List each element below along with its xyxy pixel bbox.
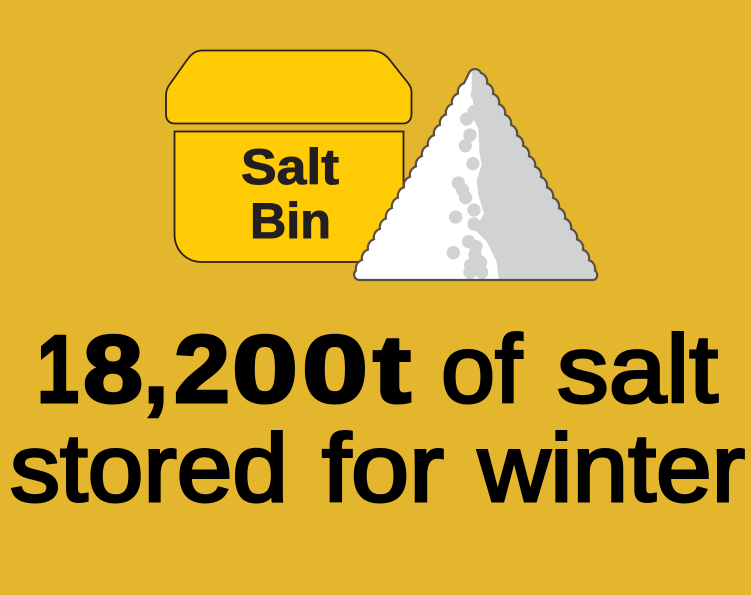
headline bbox=[10, 316, 745, 522]
headline line 1 bbox=[37, 316, 718, 423]
headline line 2 bbox=[10, 415, 745, 522]
quantity: , bbox=[144, 316, 168, 423]
bin lid bbox=[166, 50, 412, 124]
quantity: 2 bbox=[174, 316, 230, 423]
pile white side bbox=[354, 69, 597, 280]
pile outline bbox=[354, 69, 597, 280]
bin body bbox=[174, 132, 404, 262]
headline line 1: of bbox=[441, 316, 522, 423]
bin label: Salt bbox=[241, 139, 339, 195]
quantity: 1 bbox=[37, 316, 79, 423]
bin label bbox=[241, 139, 339, 249]
bin label: Bin bbox=[250, 193, 331, 249]
headline line 2: for bbox=[322, 415, 444, 522]
icon: salt pile bbox=[353, 68, 598, 282]
headline line 2: winter bbox=[477, 415, 745, 522]
quantity: t bbox=[373, 316, 411, 423]
quantity: 0 bbox=[302, 316, 368, 423]
pile shaded side bbox=[446, 70, 596, 279]
quantity: 8 bbox=[83, 316, 143, 423]
infographic bbox=[10, 50, 745, 504]
quantity: 0 bbox=[232, 316, 298, 423]
headline line 2: stored bbox=[10, 415, 288, 522]
quantity bbox=[37, 316, 411, 423]
icon: salt bin bbox=[166, 50, 412, 262]
headline line 1: salt bbox=[557, 316, 718, 423]
